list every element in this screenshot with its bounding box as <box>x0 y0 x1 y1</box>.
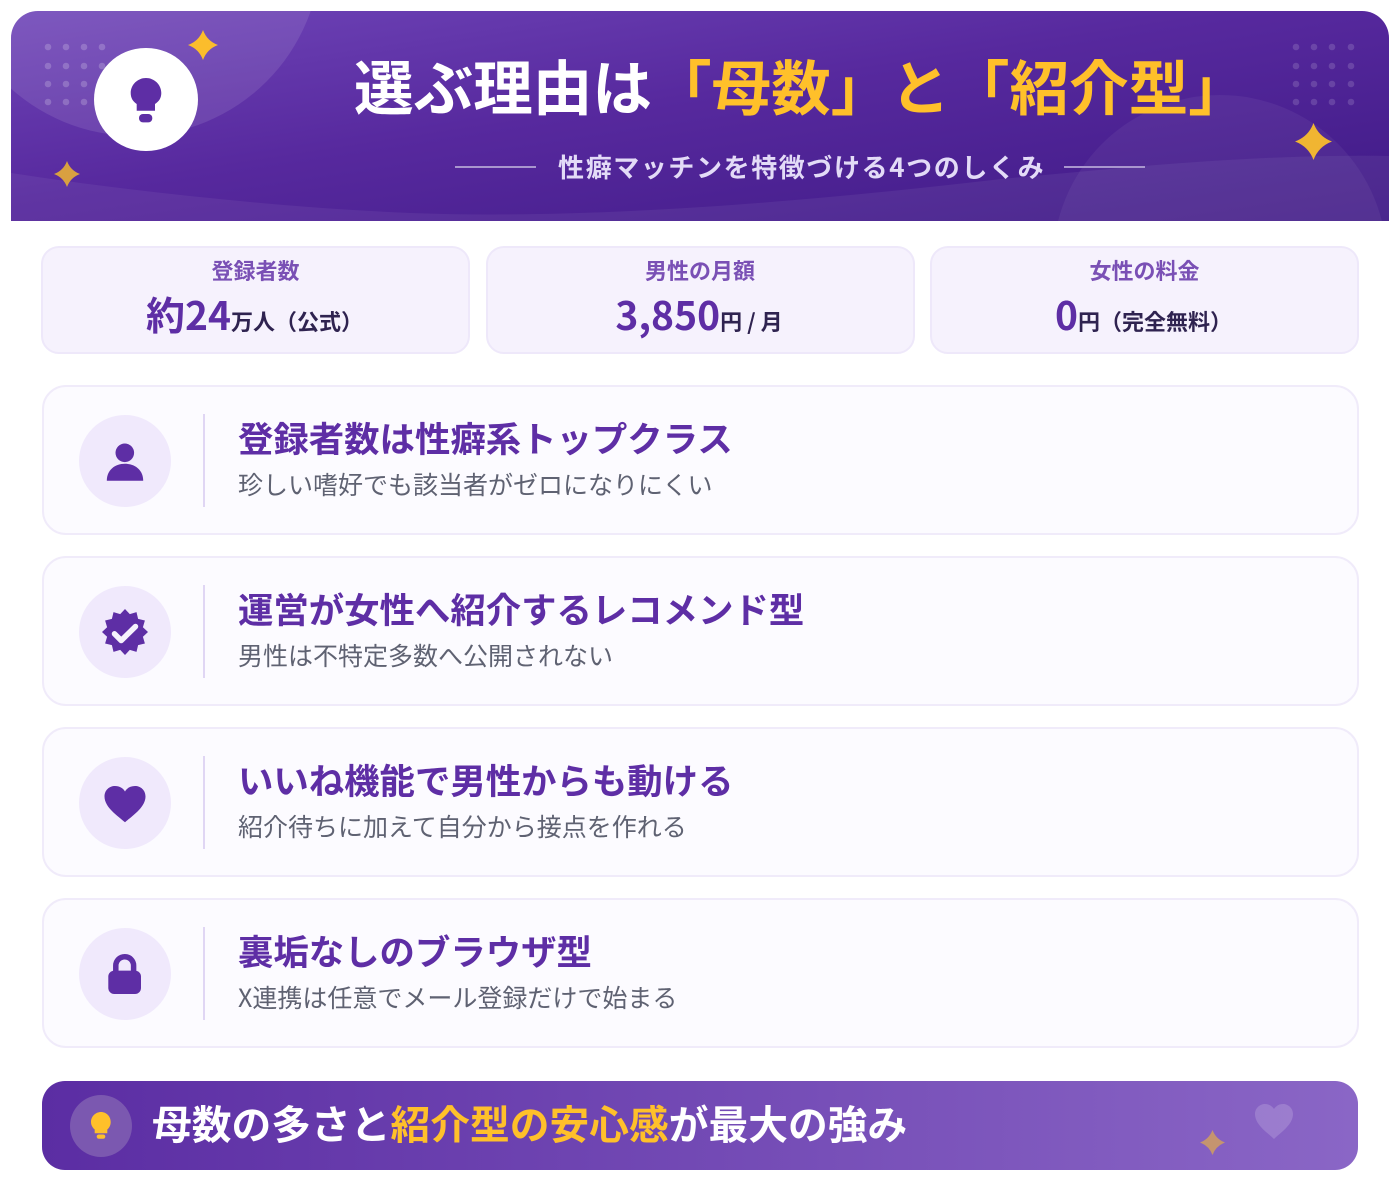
panel: reason 3 <box>42 727 1358 877</box>
icon: faded heart <box>1255 1104 1293 1139</box>
icon: padlock <box>78 928 170 1020</box>
stat card: male monthly fee: 3,850円 / 月 <box>615 286 783 342</box>
icon: heart <box>78 756 170 848</box>
text: reason 2: 男性は不特定多数へ公開されない <box>238 636 613 672</box>
stat card: registered users: 約24万人（公式） <box>146 286 363 342</box>
text: reason 3: 紹介待ちに加えて自分から接点を作れる <box>238 808 687 844</box>
title: 選ぶ理由は「母数」と「紹介型」 <box>354 42 1248 128</box>
stat card: registered users <box>41 246 470 354</box>
icon: summary bulb <box>70 1094 132 1156</box>
heading: reason 3: いいね機能で男性からも動ける <box>238 754 733 804</box>
panel: reason 2 <box>42 556 1358 706</box>
heading: reason 1: 登録者数は性癖系トップクラス <box>238 412 733 462</box>
text: reason 1: 珍しい嗜好でも該当者がゼロになりにくい <box>238 466 713 502</box>
summary text: 母数の多さと紹介型の安心感が最大の強み <box>152 1094 907 1150</box>
icon: verified badge <box>78 586 170 678</box>
icon: sparkle right <box>1295 123 1332 160</box>
heading: reason 2: 運営が女性へ紹介するレコメンド型 <box>238 582 804 634</box>
panel: reason 1 <box>42 385 1358 535</box>
icon: light bulb badge <box>94 48 198 151</box>
summary banner <box>42 1080 1358 1170</box>
icon: sparkle top <box>188 30 218 60</box>
icon: person <box>78 414 170 506</box>
header banner <box>11 11 1389 221</box>
stat card: registered users: 登録者数 <box>211 254 300 286</box>
stat card: female fee <box>930 246 1359 354</box>
subtitle: 性癖マッチンを特徴づける4つのしくみ <box>558 148 1045 185</box>
text: reason 4: X連携は任意でメール登録だけで始まる <box>238 978 677 1014</box>
icon: faded sparkle <box>1200 1130 1225 1155</box>
panel: reason 4 <box>42 898 1358 1048</box>
icon: sparkle bottom left <box>54 161 80 187</box>
stat card: male monthly fee <box>486 246 914 354</box>
stat card: female fee: 0円（完全無料） <box>1055 286 1232 342</box>
heading: reason 4: 裏垢なしのブラウザ型 <box>238 924 592 976</box>
stat card: male monthly fee: 男性の月額 <box>645 254 755 286</box>
stat card: female fee: 女性の料金 <box>1089 254 1200 286</box>
